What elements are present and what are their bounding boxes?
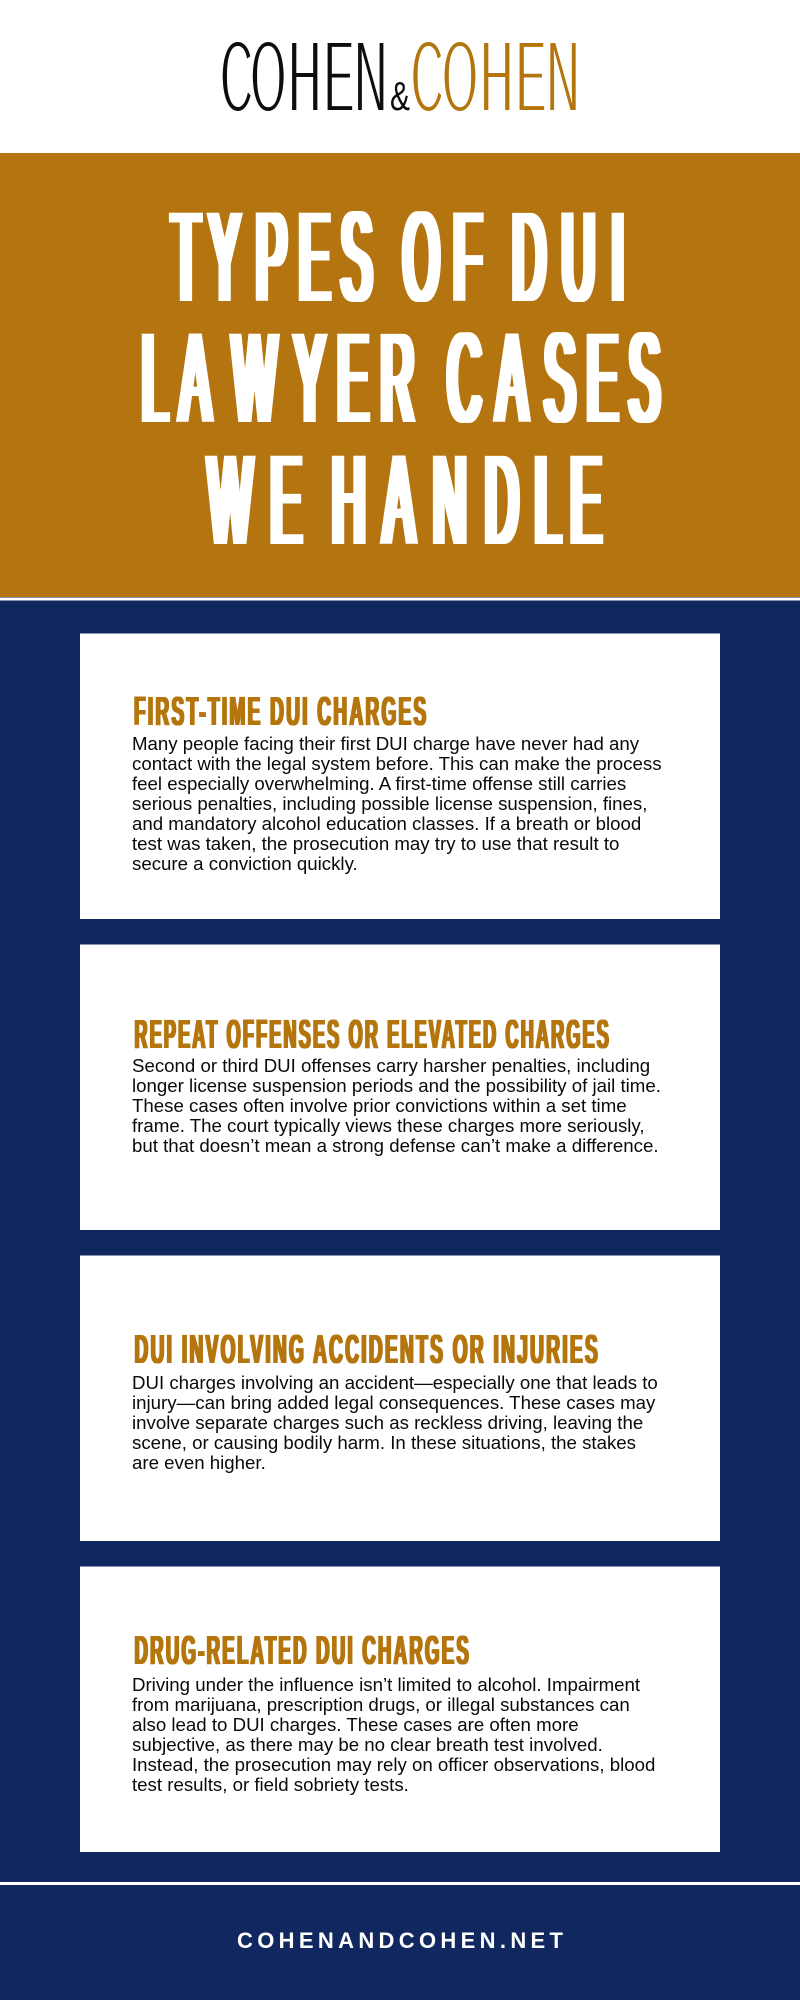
body text: first-time DUI charges: secure a conviction quickly. [132,853,358,874]
panel: drug-related DUI charges [80,1566,720,1852]
body text: drug-related DUI charges: Instead, the prosecution may rely on officer observations, blood [132,1754,655,1775]
title: WE HANDLE [208,430,601,572]
panel: first-time DUI charges: FIRST-TIME DUI CHARGES [134,688,428,734]
divider under title [0,598,800,600]
body text: repeat offenses or elevated charges: but that doesn’t mean a strong defense can’t make a difference. [132,1135,659,1156]
body text: drug-related DUI charges: also lead to DUI charges. These cases are often more [132,1714,579,1735]
body text: drug-related DUI charges [132,1674,655,1795]
title band [0,153,800,597]
body text: DUI involving accidents or injuries: are even higher. [132,1452,266,1473]
title: TYPES OF DUI [172,187,624,329]
logo: Cohen & Cohen: COHEN [411,19,579,134]
body text: drug-related DUI charges: subjective, as there may be no clear breath test involved. [132,1734,603,1755]
title: LAWYER CASES [142,308,660,450]
body text: repeat offenses or elevated charges: These cases often involve prior convictions within a set time [132,1095,627,1116]
logo: Cohen & Cohen [220,19,579,134]
body text: first-time DUI charges: test was taken, the prosecution may try to use that result to [132,833,619,854]
logo: Cohen & Cohen: & [390,73,410,119]
body text: first-time DUI charges: feel especially overwhelming. A first-time offense still carries [132,773,626,794]
panel: first-time DUI charges [80,634,720,919]
body text: DUI involving accidents or injuries: involve separate charges such as reckless driving, leaving the [132,1412,643,1433]
panel: repeat offenses or elevated charges [80,944,720,1230]
body text: repeat offenses or elevated charges: Second or third DUI offenses carry harsher penalties, including [132,1055,650,1076]
logo band [0,0,800,153]
body text: drug-related DUI charges: Driving under the influence isn’t limited to alcohol. Impairment [132,1674,641,1695]
body text: first-time DUI charges: serious penalties, including possible license suspension, fines, [132,793,647,814]
body text: first-time DUI charges: Many people facing their first DUI charge have never had any [132,733,640,754]
body text: DUI involving accidents or injuries: DUI charges involving an accident—especially one that leads to [132,1372,658,1393]
body text: drug-related DUI charges: test results, or field sobriety tests. [132,1774,409,1795]
body text: DUI involving accidents or injuries [132,1372,658,1473]
body text: repeat offenses or elevated charges: frame. The court typically views these charges more seriously, [132,1115,645,1136]
body text: first-time DUI charges: contact with the legal system before. This can make the process [132,753,662,774]
body text: repeat offenses or elevated charges [132,1055,661,1156]
body text: repeat offenses or elevated charges: longer license suspension periods and the possibility of jail time. [132,1075,661,1096]
panel: DUI involving accidents or injuries [80,1256,720,1541]
logo: Cohen & Cohen: COHEN [220,19,387,134]
body text: first-time DUI charges: and mandatory alcohol education classes. If a breath or blood [132,813,641,834]
footer divider [0,1882,800,1885]
footer website: COHENANDCOHEN.NET [237,1928,564,1953]
body text: DUI involving accidents or injuries: scene, or causing bodily harm. In these situations, the stakes [132,1432,636,1453]
title [142,187,660,572]
body text: drug-related DUI charges: from marijuana, prescription drugs, or illegal substances can [132,1694,630,1715]
body text: first-time DUI charges [132,733,662,874]
body text: DUI involving accidents or injuries: injury—can bring added legal consequences. These cases may [132,1392,656,1413]
